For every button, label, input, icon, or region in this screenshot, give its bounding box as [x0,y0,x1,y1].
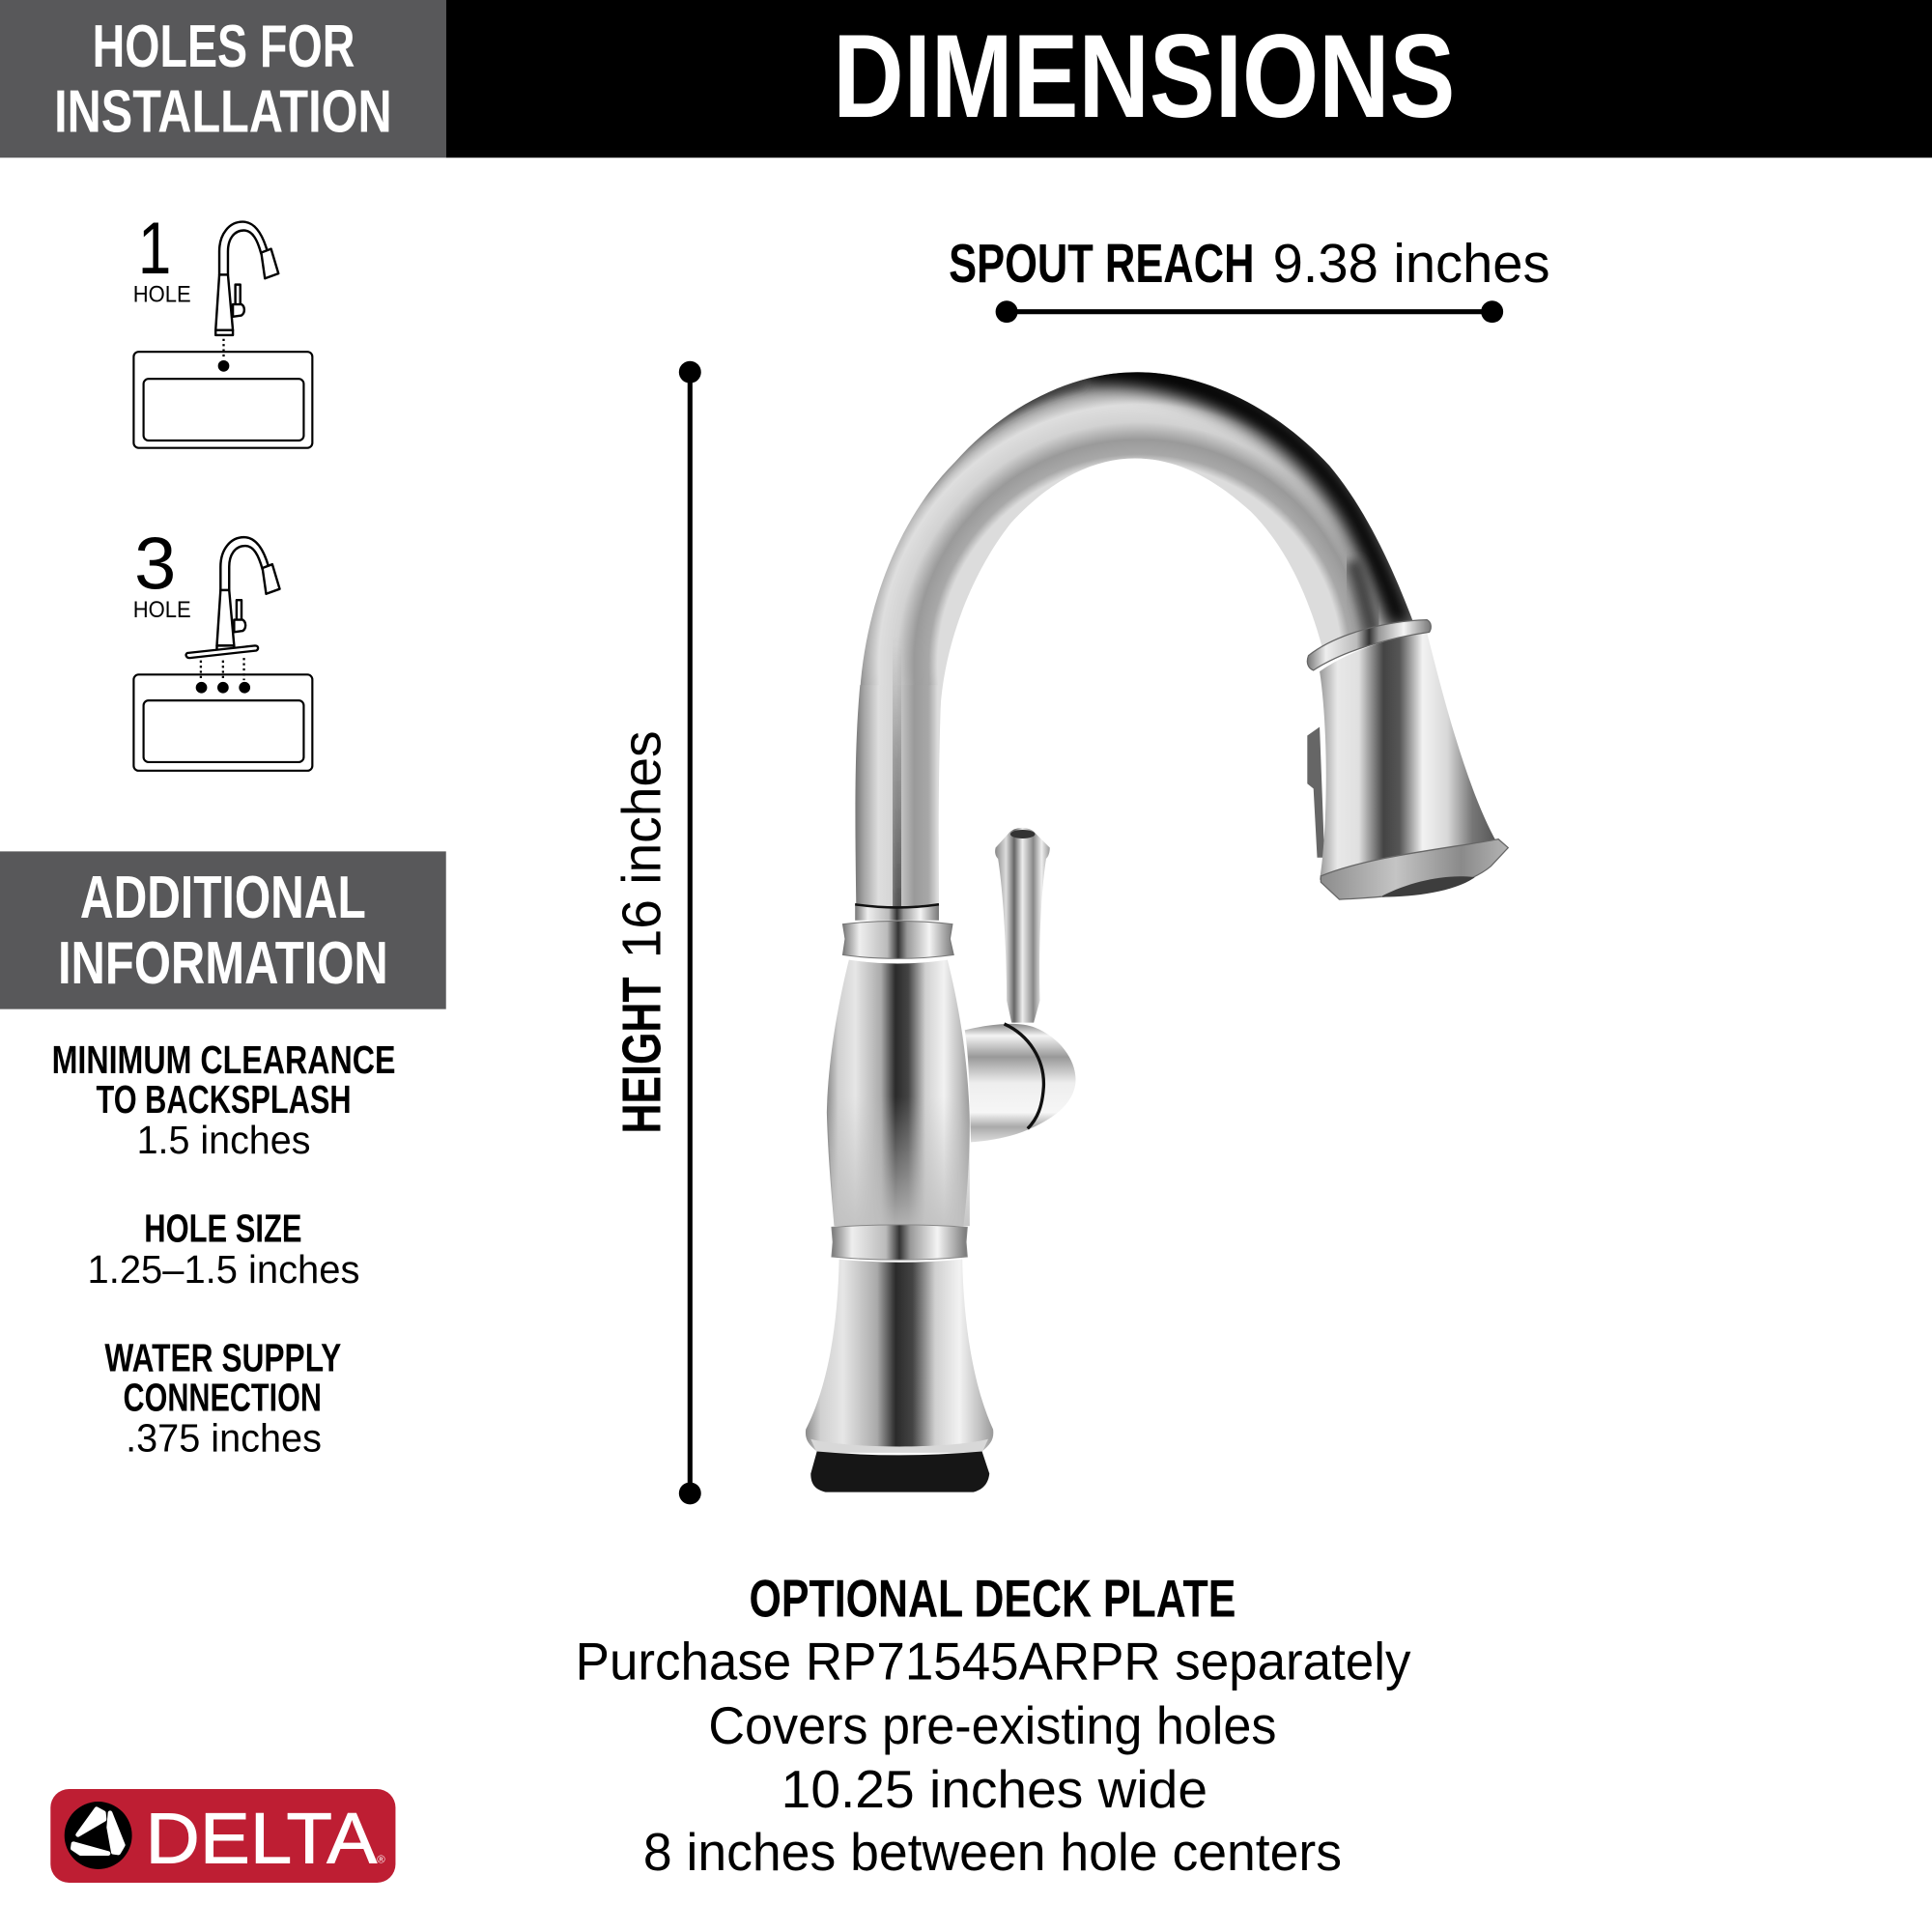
delta logo: DELTA [146,1799,378,1879]
optional deck plate text: Covers pre-existing holes [708,1695,1276,1755]
header: additional information [0,851,446,1009]
spout reach dimension: 9.38 inches [1273,233,1550,294]
height dimension [611,361,701,1504]
info: water supply connection [104,1336,341,1461]
lower body band [832,1225,967,1260]
optional deck plate text: Purchase RP71545ARPR separately [576,1632,1411,1691]
info: water supply connection: .375 inches [126,1416,322,1461]
faucet photo illustration [806,367,1508,1492]
header: additional information: INFORMATION [58,929,388,997]
neck collar [842,903,953,958]
optional deck plate text [576,1568,1411,1882]
optional deck plate text: 8 inches between hole centers [643,1822,1342,1882]
three hole installation diagram [133,524,312,771]
info: water supply connection: CONNECTION [124,1375,322,1419]
info: minimum clearance: MINIMUM CLEARANCE [52,1037,395,1082]
one hole installation diagram [133,208,312,448]
three hole installation diagram: 3 [134,524,176,606]
flared base [806,1260,993,1492]
spout reach dimension [949,233,1550,323]
faucet body [827,960,970,1226]
header: dimensions title: DIMENSIONS [833,10,1455,142]
header: holes for installation: INSTALLATION [54,77,392,145]
info: minimum clearance [52,1037,395,1162]
optional deck plate text: 10.25 inches wide [781,1759,1208,1819]
info: hole size [88,1207,359,1292]
optional deck plate text: OPTIONAL DECK PLATE [750,1568,1236,1628]
spout reach dimension: SPOUT REACH [949,233,1254,294]
delta logo [50,1789,395,1883]
height dimension: HEIGHT [611,977,672,1133]
height dimension: 16 inches [611,730,672,958]
info: hole size: HOLE SIZE [144,1207,301,1251]
header: holes for installation [0,0,446,157]
header: additional information: ADDITIONAL [80,864,366,931]
one hole installation diagram: 1 [138,208,171,290]
header: holes for installation: HOLES FOR [93,13,355,80]
info: minimum clearance: 1.5 inches [137,1118,310,1162]
three hole installation diagram: HOLE [133,597,191,623]
one hole installation diagram: HOLE [133,281,191,307]
handle lever [995,828,1050,1023]
spout arch [855,367,1413,924]
info: water supply connection: WATER SUPPLY [104,1336,341,1380]
info: hole size: 1.25–1.5 inches [88,1247,359,1292]
pull-down spray head [1307,620,1508,899]
info: minimum clearance: TO BACKSPLASH [96,1077,352,1122]
header: dimensions title [446,0,1932,157]
handle hub [965,1024,1076,1142]
delta logo: ® [377,1855,385,1866]
